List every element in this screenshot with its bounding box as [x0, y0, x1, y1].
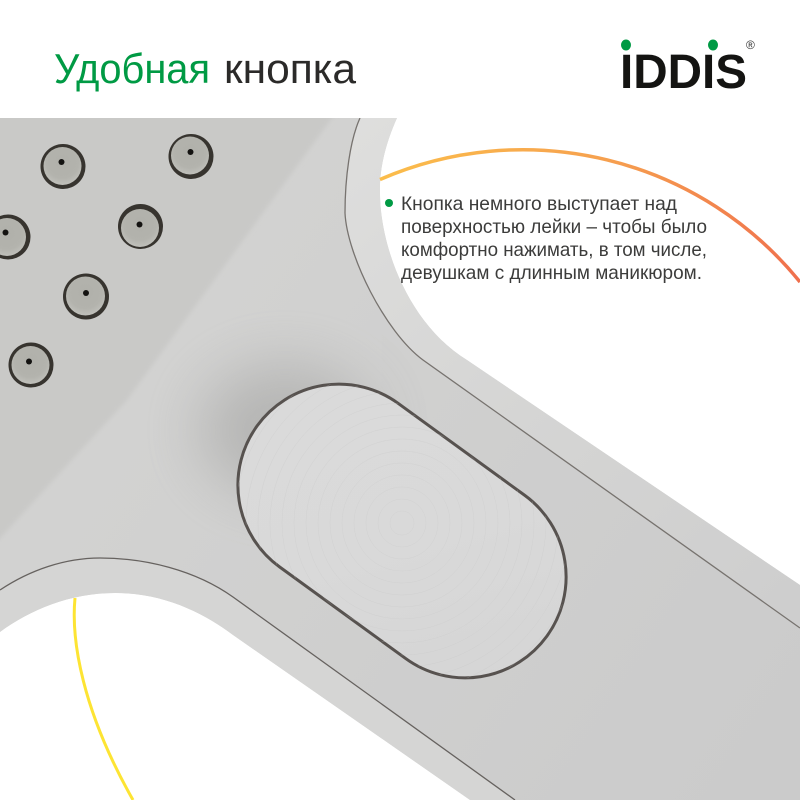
- nozzle: [118, 204, 163, 249]
- nozzle: [0, 214, 30, 260]
- title: кнопка: [224, 45, 357, 92]
- nozzle: [63, 274, 109, 320]
- nozzle: [40, 144, 86, 189]
- description text: девушкам с длинным маникюром.: [401, 262, 702, 284]
- description text: Кнопка немного выступает над: [401, 193, 678, 215]
- nozzle: [8, 342, 54, 388]
- title: Удобная: [54, 45, 210, 92]
- description text: комфортно нажимать, в том числе,: [401, 239, 707, 261]
- button: [236, 382, 568, 680]
- logo: IDDIS: IDDIS: [620, 46, 747, 99]
- yellow arc: [74, 598, 133, 800]
- title: [54, 45, 357, 92]
- orange arc: [380, 150, 800, 282]
- bullet: [385, 199, 393, 207]
- logo: IDDIS: ®: [746, 38, 755, 52]
- nozzle: [168, 134, 214, 179]
- description text: поверхностью лейки – чтобы было: [401, 216, 707, 238]
- description text: [401, 193, 707, 284]
